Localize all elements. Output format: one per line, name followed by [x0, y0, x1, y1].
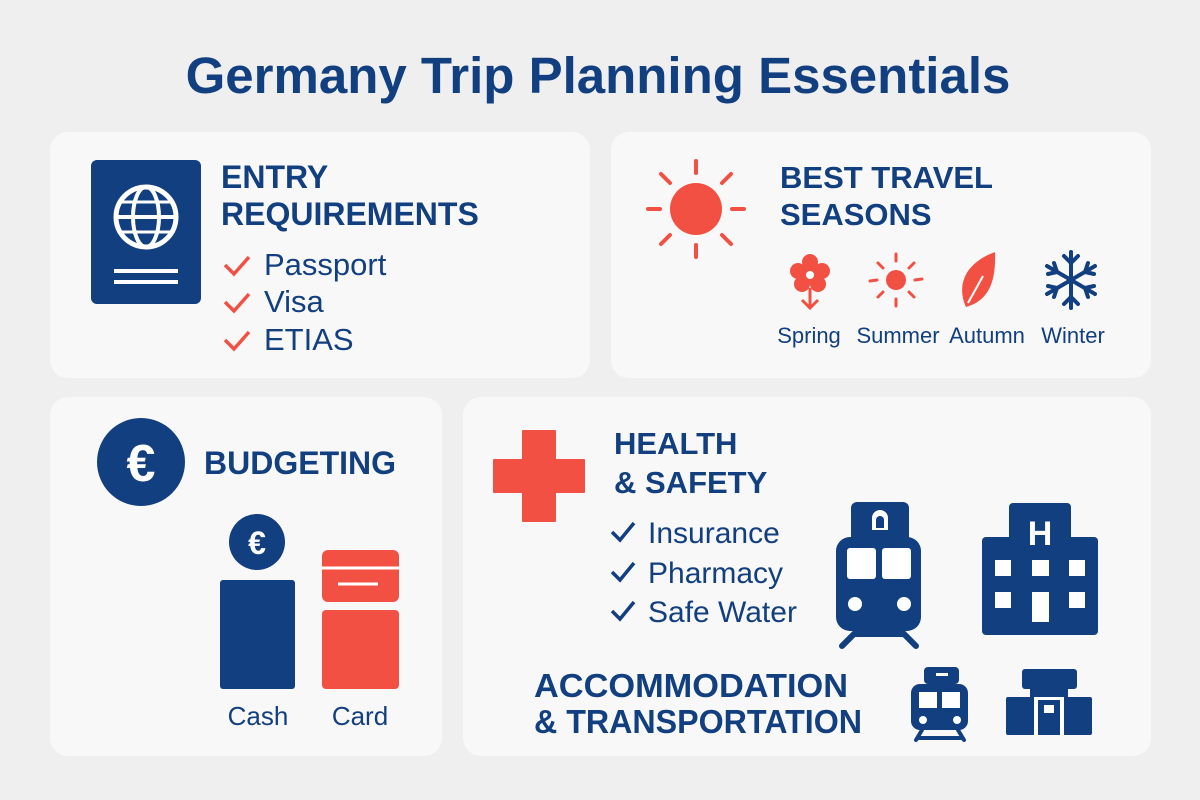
icon: cash bar: [220, 514, 295, 689]
icon: autumn leaf: [962, 252, 995, 307]
season labels: Autumn: [949, 323, 1025, 348]
heading: entry requirements: ENTRY: [221, 159, 328, 195]
checklist: health: Safe Water: [648, 596, 797, 629]
heading: entry requirements: [221, 159, 479, 232]
heading: accommodation & transportation: [534, 667, 862, 740]
heading: best travel seasons: SEASONS: [780, 197, 932, 232]
icon: card bar: [322, 550, 399, 689]
heading: health & safety: & SAFETY: [614, 465, 768, 500]
labels: cash, card: [228, 701, 388, 731]
icon: euro coin: [97, 418, 185, 506]
checklist: health: Insurance: [648, 517, 780, 550]
icon: sun: [648, 161, 744, 257]
title: Germany Trip Planning Essentials: [186, 47, 1010, 104]
icon: cash bar: €: [248, 525, 266, 561]
heading: best travel seasons: BEST TRAVEL: [780, 160, 993, 195]
labels: cash, card: Card: [332, 701, 388, 731]
heading: health & safety: HEALTH: [614, 426, 737, 461]
checklist: health: [612, 517, 797, 629]
icon: train large: [836, 502, 921, 646]
heading: best travel seasons: [780, 160, 993, 232]
heading: health & safety: [614, 426, 768, 500]
icon: spring flower: [790, 254, 830, 308]
panel: entry requirements: [50, 132, 590, 378]
icon: summer sun: [870, 254, 922, 306]
heading: entry requirements: REQUIREMENTS: [221, 196, 479, 232]
icon: euro coin: €: [127, 435, 155, 493]
icon: winter snowflake: [1047, 252, 1095, 308]
panel: best travel seasons: [611, 132, 1151, 378]
checklist: health: Pharmacy: [648, 557, 783, 590]
panel: health & safety / accommodation: [463, 397, 1151, 756]
icon: building: [1006, 669, 1092, 735]
icon: passport: [91, 160, 201, 304]
heading: budgeting: BUDGETING: [204, 445, 396, 481]
season labels: Spring: [777, 323, 841, 348]
season labels: [777, 323, 1105, 348]
checklist: entry: [225, 247, 387, 357]
labels: cash, card: Cash: [228, 701, 288, 731]
heading: accommodation & transportation: & TRANSPORTATION: [534, 703, 862, 740]
checklist: entry: Visa: [264, 284, 325, 319]
icon: train small: [911, 667, 968, 740]
heading: accommodation & transportation: ACCOMMODATION: [534, 667, 848, 704]
icon: medical cross: [494, 431, 584, 521]
icon: hospital: [982, 503, 1098, 635]
checklist: entry: Passport: [264, 247, 387, 282]
season labels: Summer: [856, 323, 940, 348]
panel: budgeting: [50, 397, 442, 756]
season labels: Winter: [1041, 323, 1105, 348]
icon: hospital: H: [1028, 515, 1052, 553]
checklist: entry: ETIAS: [264, 322, 354, 357]
